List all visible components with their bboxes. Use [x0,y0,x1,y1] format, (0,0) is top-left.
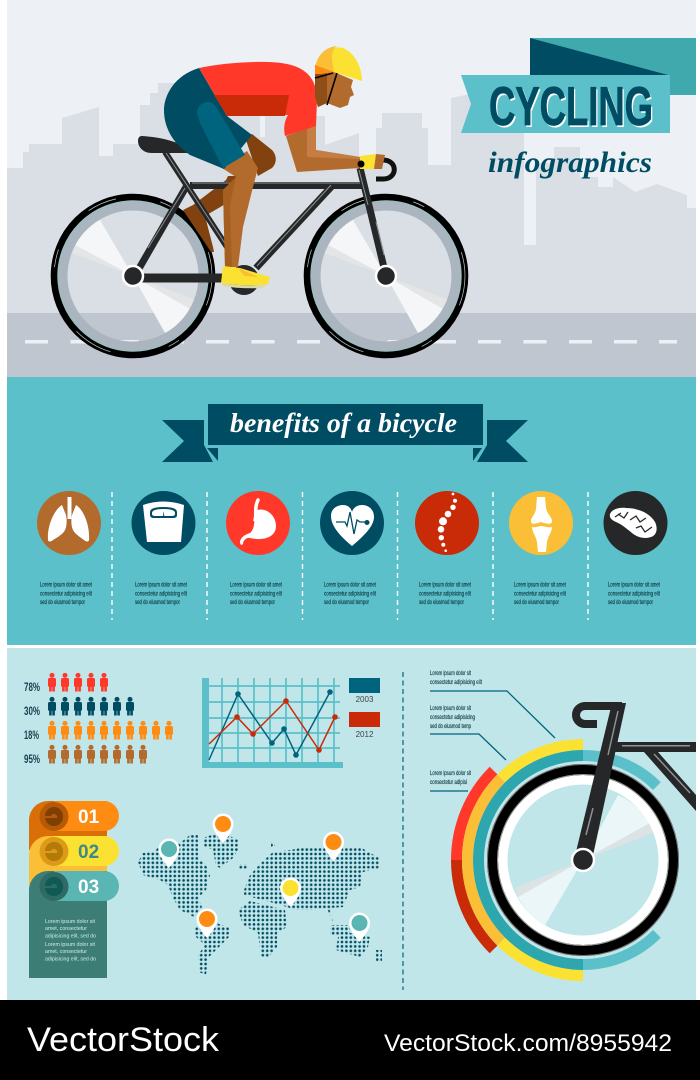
text: spine: consectetur adipisicing elit [419,590,471,597]
text: lungs: sed do eiusmod tempor [40,599,86,606]
text: scale [135,582,187,606]
step 01: 01 [78,807,100,828]
title banner [461,38,696,139]
percent labels [24,680,40,766]
pin teal australia [349,912,370,942]
callout 2 [430,705,506,760]
icon: knee joint [509,491,573,555]
rear hub [123,266,143,286]
text: brain: consectetur adipisicing elit [608,590,660,597]
far knee [246,134,276,176]
tubes [133,152,394,278]
text: heart: sed do eiusmod tempor [324,599,370,606]
tire [492,770,674,950]
rear wheel [54,197,212,355]
greenland [203,832,239,868]
south america [194,920,230,975]
arm light [307,125,360,159]
text: spine [419,582,471,606]
panel: hero city scene [7,0,696,377]
step 03 with text panel [29,871,119,978]
city skyline [7,83,696,314]
pin yellow middle east [280,878,301,907]
step 03 with text panel: 03 [78,877,99,898]
text: brain: Lorem ipsum dolor sit amet [608,582,660,589]
big wheel with data arcs [451,703,696,981]
callouts [430,670,555,791]
islands [239,842,382,962]
africa [238,901,287,958]
icon: lungs [37,491,101,555]
percent labels: 78% [24,680,40,694]
hand [374,154,385,169]
arm [286,125,360,172]
light teal arc lower [583,930,661,970]
yellow arc upper [497,739,583,782]
front hub [376,266,396,286]
text: lungs [40,582,92,606]
series 2012 [209,698,338,753]
jersey dark band [214,95,289,116]
helmet [315,47,362,81]
row 30% [48,697,134,716]
hub [572,849,594,871]
icon: stomach [226,491,290,555]
callout 2: Lorem ipsum dolor sit [430,705,471,712]
red arc upper [451,767,497,860]
shoe [221,266,270,285]
orange arc [462,774,505,946]
dashed separators [112,492,588,620]
near leg [222,151,258,267]
rim [502,780,664,940]
text: knee [514,582,566,606]
shorts highlight [197,102,245,168]
text: knee: consectetur adipisicing elit [514,590,566,597]
red arc lower [451,860,497,953]
callout 1 [430,670,555,738]
text: brain [608,582,660,606]
callout 2: sed do eiusmod temp [430,723,471,730]
percent labels: 30% [24,704,40,718]
step text: amet, consectetur [45,949,87,955]
dotted world map [138,832,382,975]
footer watermark: VectorStock [27,1021,220,1059]
text: knee: Lorem ipsum dolor sit amet [514,582,566,589]
callout 1: Lorem ipsum dolor sit [430,670,471,677]
frame highlights [148,153,384,266]
footer watermark: VectorStock.com/8955942 [384,1030,672,1057]
near leg shading [223,177,236,267]
icon: brain [604,491,668,555]
chart legend: 2003 [356,695,374,704]
chart legend: 2012 [356,730,374,739]
saddle [138,136,196,153]
icon: weighing scale [132,491,196,555]
fork and handlebar [574,703,626,860]
percent labels: 95% [24,752,40,766]
neck [315,72,327,107]
jersey [199,62,317,136]
panel: statistics background [7,648,696,1000]
icon: spine [415,491,479,555]
eurasia [244,847,379,923]
road [7,313,696,377]
chart legend [349,678,380,739]
text: spine: sed do eiusmod tempor [419,599,465,606]
series 2003 [209,689,333,760]
text: spine: Lorem ipsum dolor sit amet [419,582,471,589]
row 78% [48,673,108,692]
text: brain: sed do eiusmod tempor [608,599,654,606]
glove [360,154,376,169]
icon: heart [320,491,384,555]
step 02: 02 [78,842,99,863]
callout 1: consectetur adipisicing elit [430,679,482,686]
percent labels: 18% [24,728,39,742]
ribbon heading: benefits of a bicycle [230,408,457,438]
callout 2: consectetur adipisicing [430,714,475,721]
ribbon heading [162,404,528,462]
text: stomach: sed do eiusmod tempor [230,599,276,606]
pin orange greenland [212,814,234,843]
text: knee: sed do eiusmod tempor [514,599,560,606]
light teal arc upper [583,750,661,790]
pictogram chart [24,673,173,766]
teal arc [473,750,583,970]
front wheel [307,197,465,355]
panel: benefits [7,377,696,645]
step text: amet, consectetur [45,926,87,932]
text: heart [324,582,376,606]
callout 3: Lorem ipsum dolor sit [430,770,471,777]
text: stomach: consectetur adipisicing elit [230,590,282,597]
shorts [164,68,252,169]
step text: Lorem ipsum dolor sit [45,919,95,925]
step text: adipisicing elit, sed do [45,934,96,940]
bicycle frame [123,136,396,295]
text: scale: sed do eiusmod tempor [135,599,181,606]
pin teal north america [158,839,180,868]
road dashes [25,340,677,344]
pin orange south america [196,908,218,938]
vertical dashed divider [402,672,404,990]
step text: Lorem ipsum dolor sit [45,942,95,948]
cyclist far leg [183,176,240,252]
top tube [614,742,696,811]
text: scale: Lorem ipsum dolor sit amet [135,582,187,589]
row 18% [48,721,173,740]
yellow arc lower [497,938,583,981]
callout 3: consectetur adipisi [430,779,467,786]
footer watermark [0,1000,700,1080]
text: stomach [230,582,282,606]
map pins [158,814,370,942]
text: heart: Lorem ipsum dolor sit amet [324,582,376,589]
step 01 [29,801,119,850]
text: heart: consectetur adipisicing elit [324,590,376,597]
cyclist [164,46,385,288]
step text: adipisicing elit, sed do [45,956,96,962]
wheel wedges [583,795,650,860]
numbered steps [29,801,119,978]
text: lungs: consectetur adipisicing elit [40,590,92,597]
step text [45,919,96,962]
head [315,70,354,108]
subtitle: infographics [488,146,652,179]
north america [138,835,210,917]
pin orange asia [323,832,344,861]
crank [229,265,259,295]
step 02 [29,836,119,885]
australia [336,933,370,957]
text: scale: consectetur adipisicing elit [135,590,187,597]
text: lungs: Lorem ipsum dolor sit amet [40,582,92,589]
helmet straps [315,73,337,105]
callout 3 [430,770,471,791]
text: stomach: Lorem ipsum dolor sit amet [230,582,282,589]
row 95% [48,745,147,764]
line chart [202,678,343,768]
